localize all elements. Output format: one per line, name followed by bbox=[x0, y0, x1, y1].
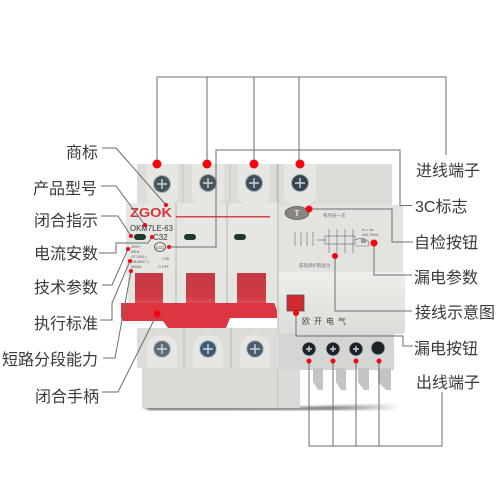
right labels: 接线示意图 bbox=[415, 303, 495, 322]
leakage parameters small text bbox=[362, 228, 379, 237]
left labels: 闭合指示 bbox=[34, 212, 98, 230]
top terminal block bbox=[137, 164, 392, 206]
leader line: trademark bbox=[102, 148, 166, 205]
test button bbox=[285, 206, 309, 220]
left labels: 商标 bbox=[66, 144, 98, 162]
rated current: C32 bbox=[153, 233, 168, 242]
right labels: 漏电按钮 bbox=[414, 340, 478, 358]
leader line: self-test button bbox=[309, 209, 413, 242]
leakage parameters small text: In x IΔn bbox=[362, 228, 374, 232]
leader lines: outlet terminals bbox=[309, 361, 442, 446]
technical text: GT1009-1 bbox=[131, 255, 147, 259]
leader line: 3C mark bbox=[169, 150, 412, 247]
leader line: current rating bbox=[99, 237, 152, 253]
brand logo: ZGOK bbox=[130, 205, 173, 220]
residual current module lower section bbox=[278, 272, 405, 334]
technical text: 6000A bbox=[131, 265, 142, 269]
left labels: 产品型号 bbox=[33, 180, 97, 198]
CCC mark bbox=[154, 242, 166, 252]
leader line: leakage parameters bbox=[374, 243, 412, 275]
outlet terminal block bbox=[278, 334, 394, 408]
small caption: wiring note: 漏电保护典复位 bbox=[299, 262, 331, 269]
bottom screws bbox=[154, 340, 264, 358]
small caption: monthly test: 每月按一次 bbox=[323, 212, 346, 219]
indicator windows bbox=[134, 234, 246, 240]
red stripe bbox=[176, 216, 270, 218]
lower terminal block bbox=[137, 328, 278, 368]
toggle housing bbox=[128, 272, 278, 308]
leader line: standards bbox=[100, 261, 130, 320]
left labels: 技术参数 bbox=[34, 279, 98, 297]
leader line: technical parameters bbox=[102, 249, 128, 285]
breaker front panel bbox=[126, 203, 278, 275]
left labels: 短路分段能力 bbox=[2, 351, 98, 369]
right labels: 漏电参数 bbox=[414, 269, 478, 287]
left labels: 闭合手柄 bbox=[35, 388, 99, 406]
residual current module bbox=[278, 205, 403, 273]
leader line: closing indicator bbox=[101, 216, 131, 236]
panel: circuit breaker device bbox=[121, 164, 405, 410]
leader line: breaking capacity bbox=[103, 271, 131, 358]
right labels: 进线端子 bbox=[416, 162, 480, 180]
leader line: wiring diagram bbox=[335, 256, 412, 311]
CCC mark: CCC bbox=[156, 245, 164, 250]
left labels: 电流安数 bbox=[34, 245, 98, 263]
floor shadow bbox=[142, 404, 400, 410]
technical text: GB16917.1 bbox=[131, 260, 149, 264]
right labels: 出线端子 bbox=[416, 374, 480, 392]
leader line: leakage button bbox=[296, 313, 413, 346]
callout dots bbox=[126, 160, 382, 364]
wiring diagram bbox=[295, 229, 369, 253]
right labels bbox=[414, 162, 495, 392]
technical text bbox=[131, 245, 170, 269]
right labels: 3C标志 bbox=[415, 198, 467, 216]
left labels: 执行标准 bbox=[34, 315, 98, 333]
test button: T bbox=[295, 209, 300, 218]
leakage parameters small text: 63A 75mA bbox=[362, 233, 379, 237]
leader line: model bbox=[101, 186, 145, 225]
red leakage button bbox=[287, 295, 304, 311]
technical text: 400V~ bbox=[131, 245, 142, 249]
closing handle bar bbox=[121, 303, 277, 328]
lower housing bbox=[142, 366, 300, 408]
technical text: 50Hz bbox=[131, 250, 140, 254]
right labels: 自检按钮 bbox=[414, 234, 478, 252]
leader lines: inlet terminals bbox=[157, 77, 446, 164]
technical text: O OFF bbox=[158, 265, 170, 269]
top screws bbox=[154, 174, 308, 192]
model number: OKM7LE-63 bbox=[130, 223, 173, 233]
technical text: I ON bbox=[162, 257, 170, 261]
left labels bbox=[2, 144, 99, 406]
leader line: closing handle bbox=[102, 314, 157, 392]
brand text on module: 欧开电气 bbox=[302, 316, 350, 326]
red toggles bbox=[135, 273, 266, 304]
outlet screws bbox=[302, 341, 385, 356]
